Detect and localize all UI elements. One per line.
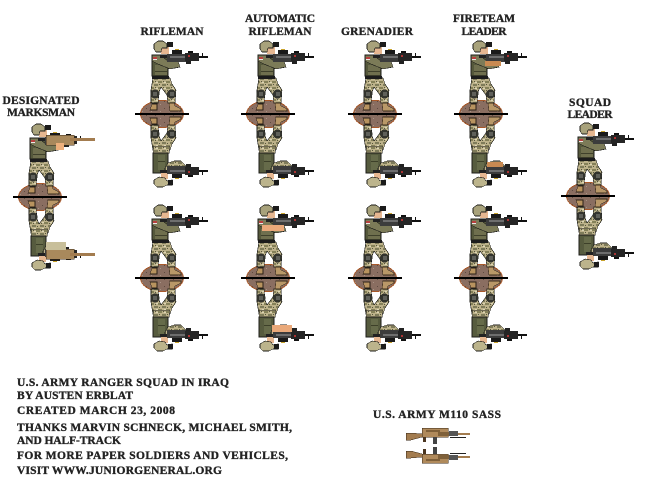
credits text block: VISIT WWW.JUNIORGENERAL.ORG xyxy=(17,465,222,477)
figure: rifleman top row xyxy=(135,41,208,187)
figure: automatic rifleman bottom row xyxy=(241,205,314,351)
figure: squad leader xyxy=(561,123,634,269)
label: rifleman: RIFLEMAN xyxy=(140,26,204,38)
credits text block: U.S. ARMY RANGER SQUAD IN IRAQ xyxy=(17,377,229,389)
figure: grenadier bottom row xyxy=(348,205,421,351)
figure: fireteam leader top row xyxy=(454,41,527,187)
label: automatic rifleman xyxy=(245,13,315,38)
icon: M110 rifle xyxy=(406,428,470,444)
label: designated marksman: DESIGNATED xyxy=(2,95,80,107)
label: squad leader xyxy=(568,97,613,121)
label: fireteam leader xyxy=(453,13,515,38)
label: squad leader: SQUAD xyxy=(569,97,611,109)
label: squad leader: LEADER xyxy=(568,109,613,121)
label: automatic rifleman: RIFLEMAN xyxy=(248,26,312,38)
figure: fireteam leader bottom row xyxy=(454,205,527,351)
heading: M110 SASS: U.S. ARMY M110 SASS xyxy=(373,409,501,421)
credits text block: FOR MORE PAPER SOLDIERS AND VEHICLES, xyxy=(17,450,288,462)
credits text block: AND HALF-TRACK xyxy=(17,435,121,447)
label: fireteam leader: FIRETEAM xyxy=(453,13,515,25)
icon: M110 rifle mirrored xyxy=(406,447,470,463)
credits text block: CREATED MARCH 23, 2008 xyxy=(17,405,175,417)
credits text block: THANKS MARVIN SCHNECK, MICHAEL SMITH, xyxy=(17,422,292,434)
figure: automatic rifleman top row xyxy=(241,41,314,187)
figure: designated marksman xyxy=(13,124,95,270)
figure: rifleman bottom row xyxy=(135,205,208,351)
label: fireteam leader: LEADER xyxy=(462,26,507,38)
credits text block xyxy=(17,377,292,477)
figure: grenadier top row xyxy=(348,41,421,187)
label: grenadier: GRENADIER xyxy=(341,26,414,38)
label: automatic rifleman: AUTOMATIC xyxy=(245,13,315,25)
credits text block: BY AUSTEN ERBLAT xyxy=(17,390,133,402)
label: designated marksman: MARKSMAN xyxy=(7,107,76,119)
label: designated marksman xyxy=(2,95,80,119)
